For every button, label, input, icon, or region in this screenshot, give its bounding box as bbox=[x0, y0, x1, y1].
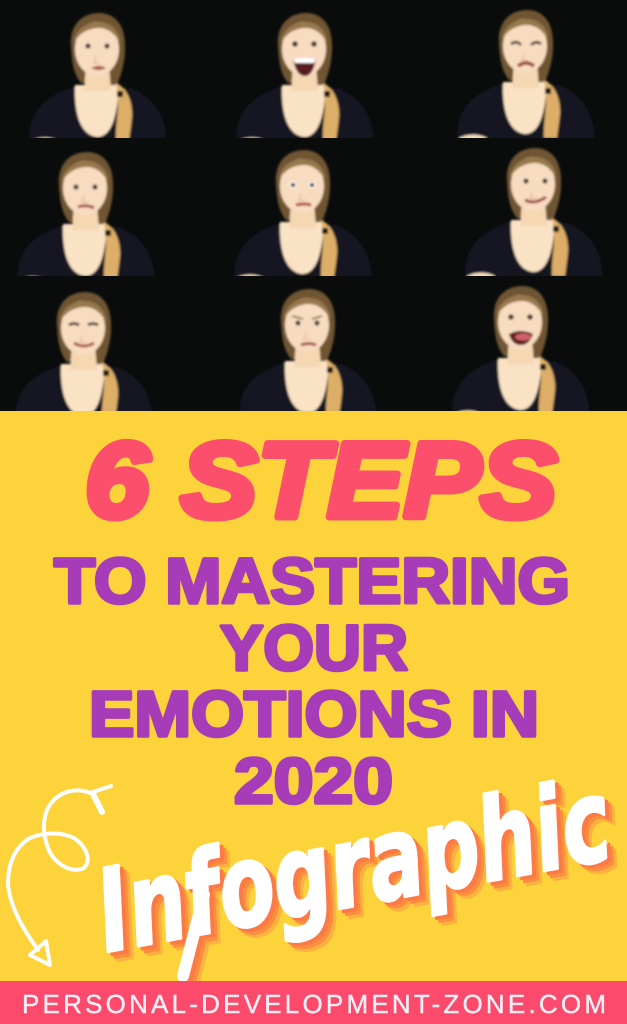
row 3 portraits bbox=[15, 284, 590, 411]
heading: to mastering your emotions in 2020: YOUR bbox=[220, 612, 408, 684]
heading: to mastering your emotions in 2020: 2020 bbox=[234, 745, 393, 817]
yellow panel bbox=[0, 411, 627, 981]
row 2 portraits bbox=[17, 148, 603, 292]
row 1 portraits bbox=[29, 10, 595, 153]
heading: 6 STEPS: 6 STEPS bbox=[85, 420, 557, 540]
icon: looping arrow bbox=[8, 786, 111, 965]
footer band bbox=[0, 981, 627, 1024]
heading: to mastering your emotions in 2020: EMOTIONS IN bbox=[89, 678, 539, 750]
photo grid: nine facial expressions bbox=[0, 0, 627, 432]
heading: to mastering your emotions in 2020 bbox=[54, 545, 570, 817]
heading: to mastering your emotions in 2020: TO MASTERING bbox=[54, 545, 570, 617]
footer url: PERSONAL-DEVELOPMENT-ZONE.COM bbox=[22, 989, 606, 1019]
